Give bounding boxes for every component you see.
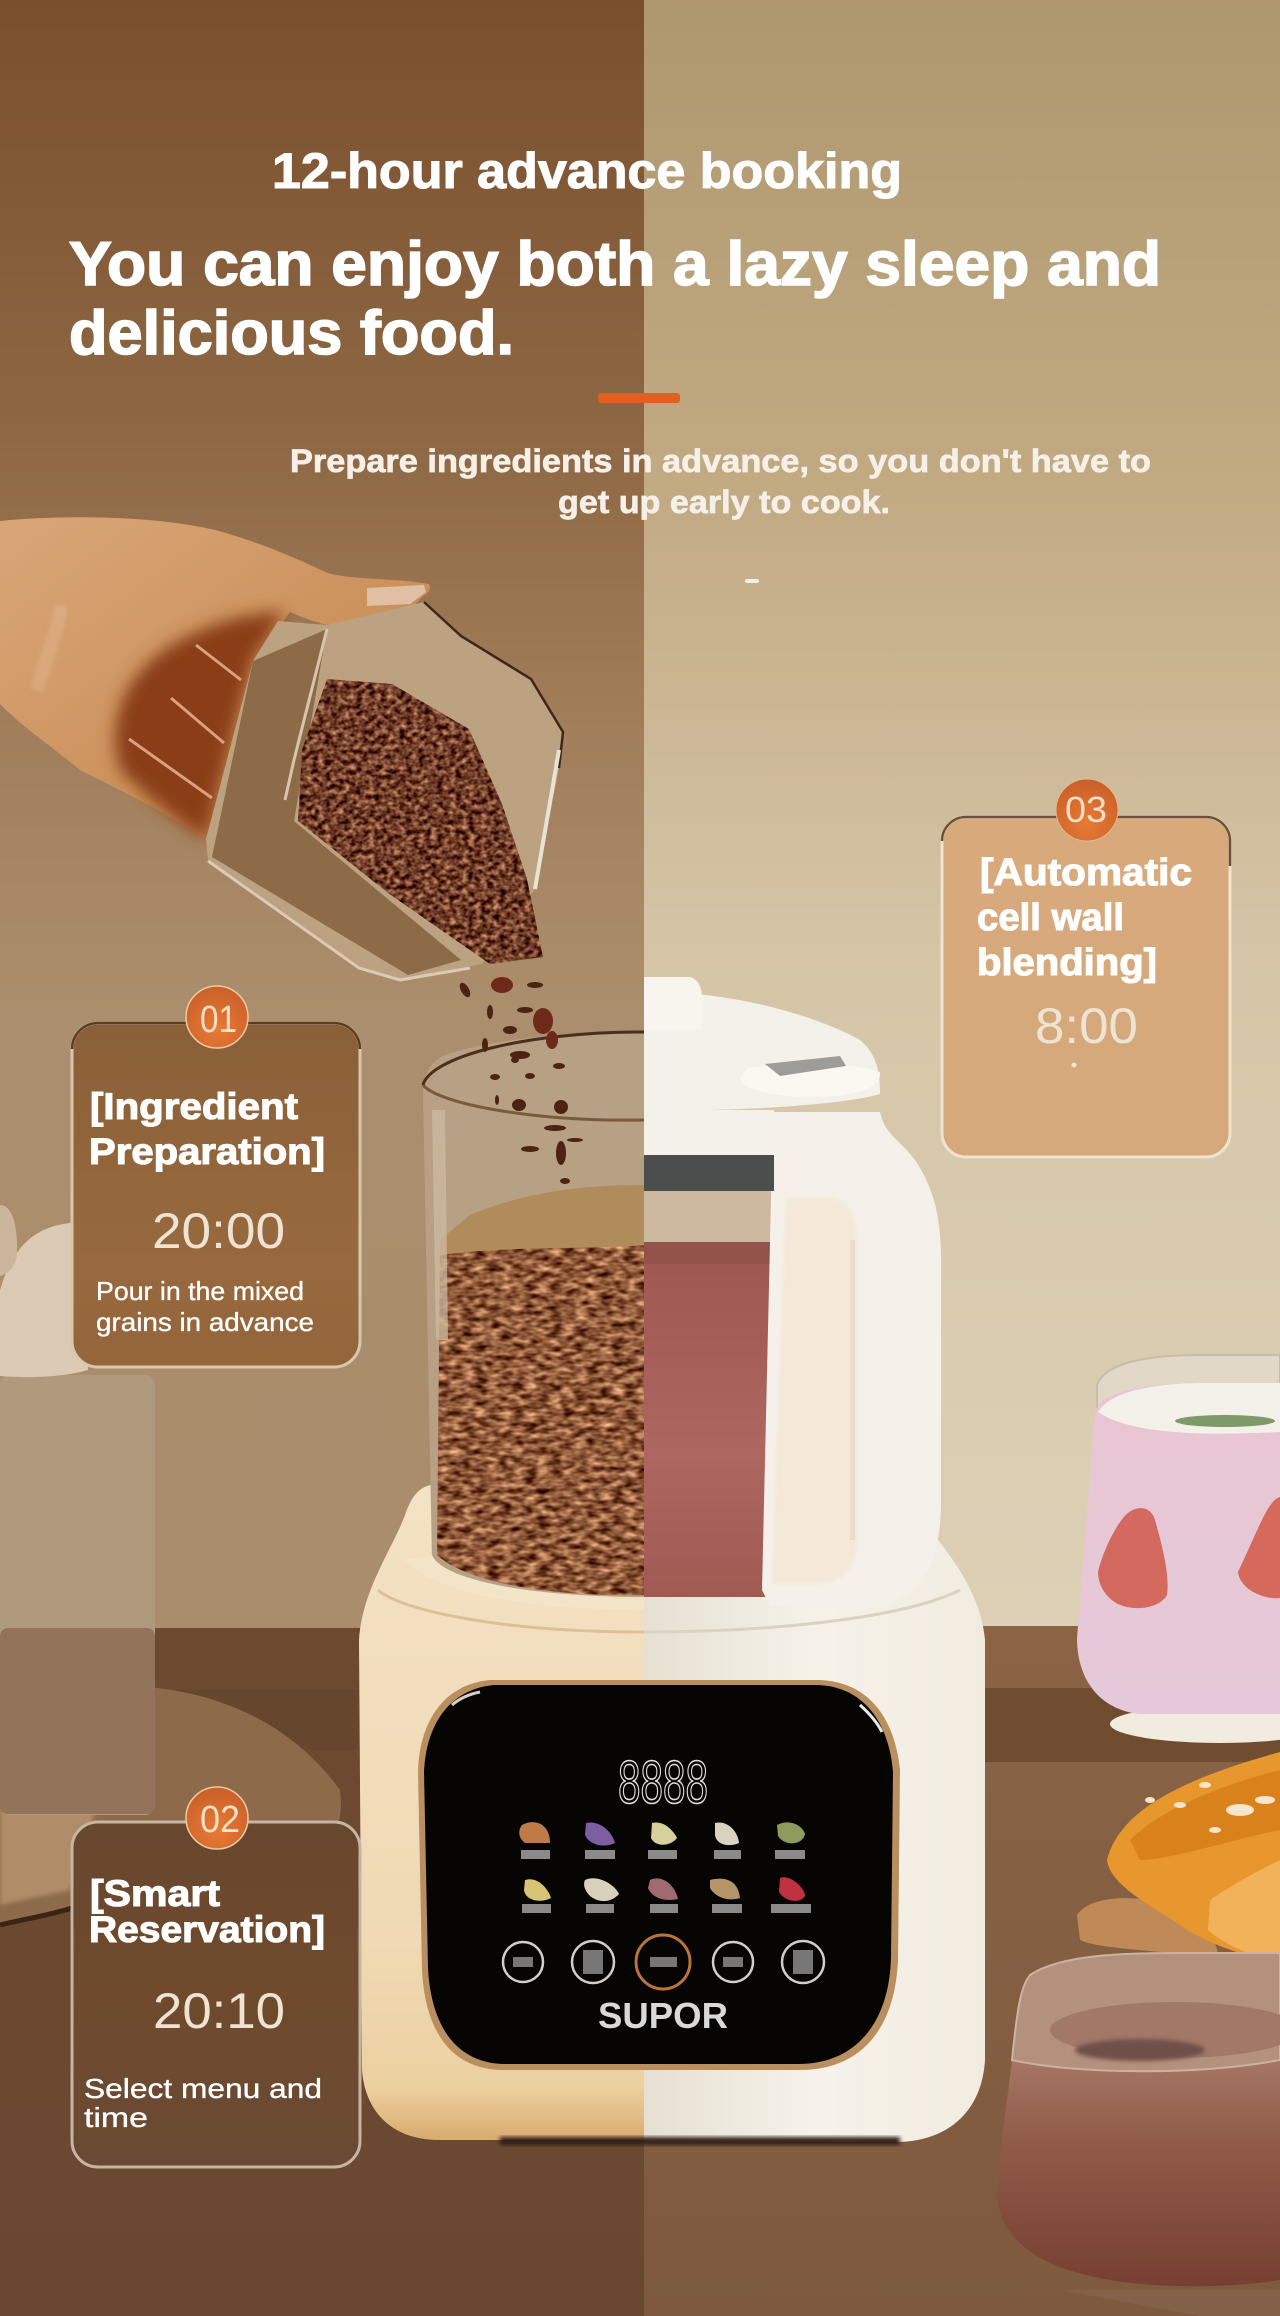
falling grains bbox=[458, 977, 583, 1184]
menu icons row 1 bbox=[519, 1822, 805, 1846]
card 3 title: blending] bbox=[977, 942, 1157, 984]
card 1 title: [Ingredient bbox=[90, 1086, 298, 1127]
description text: get up early to cook. bbox=[558, 484, 890, 520]
card 1 description: Pour in the mixed bbox=[96, 1276, 304, 1306]
jug right half with lid and smoothie bbox=[644, 977, 941, 1606]
badge 03 bbox=[1056, 779, 1118, 841]
card 3 title: cell wall bbox=[977, 897, 1124, 939]
side jug on left bbox=[0, 1205, 155, 1815]
woven mat bbox=[0, 1685, 341, 1925]
main headline: You can enjoy both a lazy sleep and bbox=[69, 230, 1161, 299]
card 2 description: time bbox=[84, 2102, 148, 2133]
digital display: 8888 bbox=[618, 1749, 708, 1816]
card 1 description: grains in advance bbox=[96, 1307, 314, 1337]
control panel bbox=[418, 1680, 900, 2070]
strawberry milk glass bbox=[1077, 1355, 1280, 1743]
touch buttons bbox=[503, 1935, 824, 1989]
card 1: ingredient preparation bbox=[72, 986, 360, 1367]
small dash mark bbox=[745, 579, 759, 583]
card 3: automatic cell wall blending bbox=[942, 779, 1230, 1157]
card 2 description: Select menu and bbox=[84, 2073, 322, 2104]
badge 01: 01 bbox=[200, 999, 237, 1041]
handle bbox=[762, 1112, 941, 1606]
hand bbox=[0, 517, 430, 839]
blender base shading over jug foot bbox=[405, 1555, 644, 1610]
card 1 time: 20:00 bbox=[152, 1203, 285, 1259]
menu labels row 1 bbox=[521, 1850, 805, 1859]
chocolate drink glass bbox=[997, 1953, 1280, 2316]
badge 02: 02 bbox=[200, 1799, 240, 1841]
subtitle: 12-hour advance booking bbox=[272, 143, 902, 199]
menu labels row 2 bbox=[522, 1904, 811, 1913]
jar side wall bbox=[212, 629, 461, 975]
card 2 title: [Smart bbox=[90, 1873, 220, 1914]
badge 01 bbox=[186, 986, 248, 1048]
grains in jug bbox=[437, 1185, 644, 1595]
card 2 time: 20:10 bbox=[153, 1983, 285, 2039]
hand holding measuring jar bbox=[0, 517, 563, 980]
badge 03: 03 bbox=[1065, 789, 1107, 830]
brand logo: SUPOR bbox=[598, 1995, 728, 2036]
grains in jar bbox=[298, 679, 543, 964]
orange accent bar bbox=[598, 393, 680, 403]
table left bbox=[0, 1628, 644, 2316]
badge 02 bbox=[186, 1787, 248, 1849]
card 1 title: Preparation] bbox=[89, 1131, 325, 1172]
blender base bbox=[359, 1484, 985, 2145]
card 2 title: Reservation] bbox=[89, 1909, 325, 1950]
card 3 time: 8:00 bbox=[1035, 998, 1138, 1054]
card 2: smart reservation bbox=[72, 1787, 360, 2167]
jug left half with grains bbox=[423, 1032, 644, 1597]
grey band bbox=[644, 1155, 774, 1191]
description text: Prepare ingredients in advance, so you don't have to bbox=[290, 443, 1151, 479]
card 3 title: [Automatic bbox=[980, 852, 1192, 894]
leaf garnish bbox=[1175, 1415, 1275, 1427]
palm shadow bbox=[115, 612, 285, 839]
pastry on wooden board bbox=[1077, 1752, 1280, 1965]
strawberry slices bbox=[1098, 1508, 1168, 1608]
wall background left bbox=[0, 0, 644, 1630]
menu icons row 2 bbox=[524, 1877, 805, 1901]
glass jar body bbox=[206, 602, 563, 980]
lid bbox=[644, 977, 880, 1110]
wall background right bbox=[644, 0, 1280, 1630]
smoothie bbox=[644, 1242, 772, 1597]
table right bbox=[644, 1626, 1280, 2316]
main headline: delicious food. bbox=[69, 299, 514, 368]
